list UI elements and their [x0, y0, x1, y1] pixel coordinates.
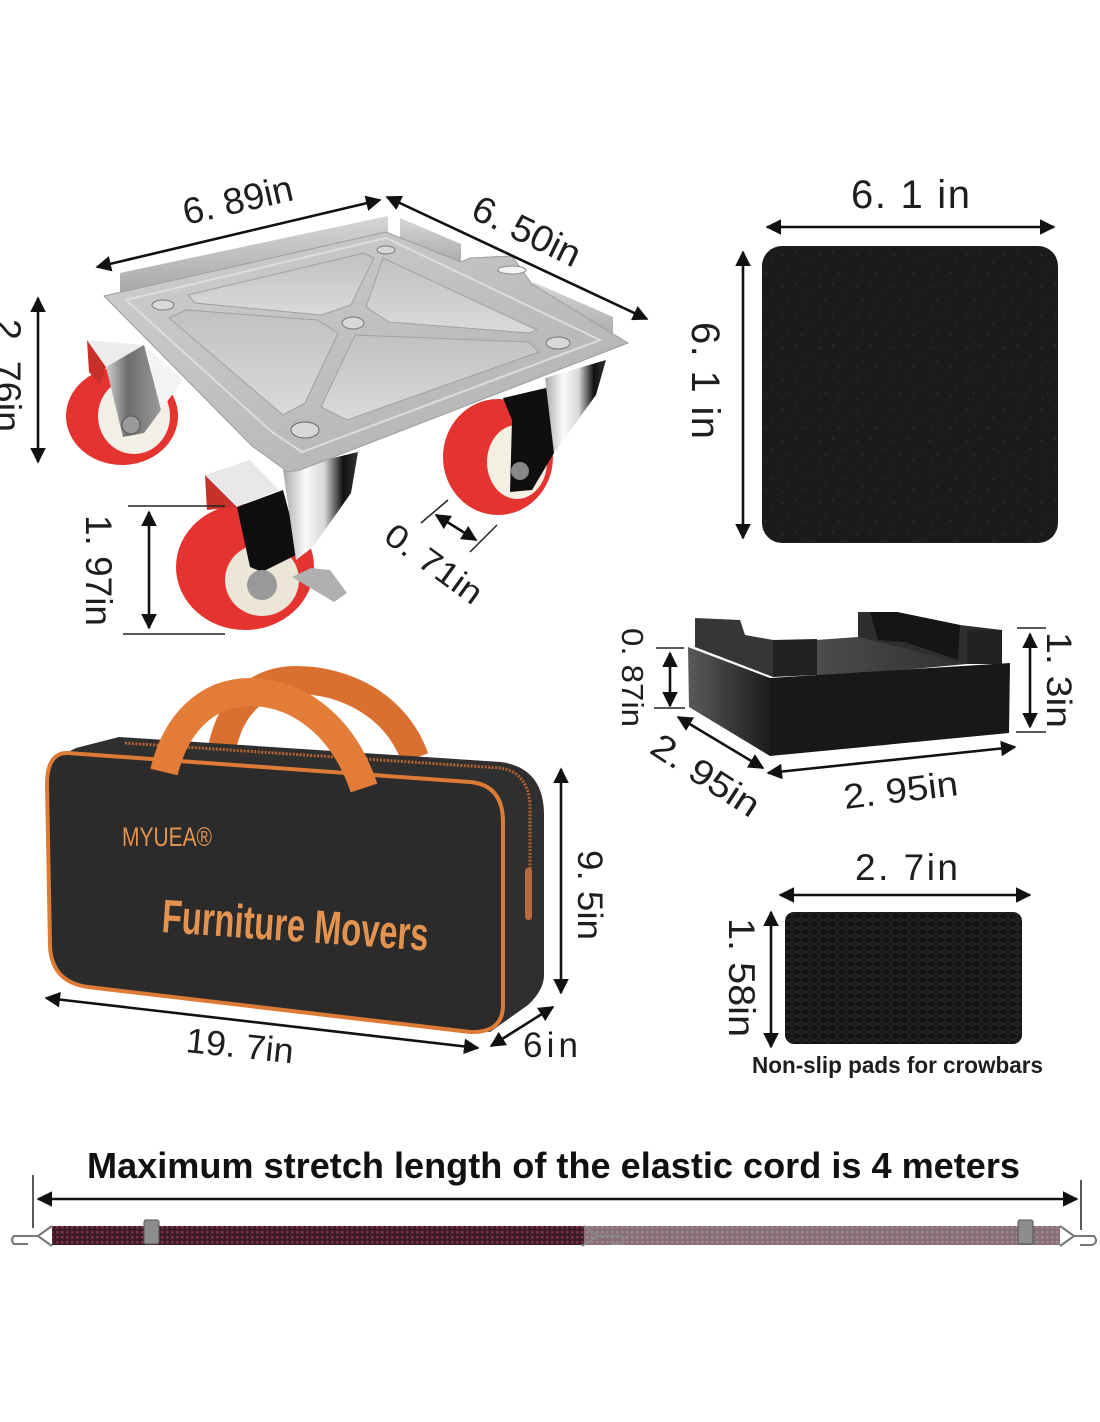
bag handle: front — [164, 692, 364, 788]
cord stretched — [584, 1226, 1060, 1245]
dimension: 9.5in: 9. 5in — [570, 850, 609, 940]
dimension: 1.58in — [721, 912, 771, 1047]
dimension: 19.7in — [46, 998, 478, 1071]
cord sliders — [144, 1220, 1033, 1244]
caster dolly with dimensions — [0, 168, 647, 634]
felt pad — [762, 246, 1058, 543]
dimension: 0.71in — [378, 500, 497, 611]
dimension: 6in — [491, 1007, 578, 1065]
dimension: 6.50in — [387, 187, 647, 319]
zipper pull — [525, 868, 532, 920]
dimension: 6.50in: 6. 50in — [465, 187, 588, 275]
dimension: 1.97in: 1. 97in — [78, 515, 119, 626]
dimension: 6.89in: 6. 89in — [179, 168, 297, 233]
right hook — [1060, 1226, 1096, 1246]
riser block — [688, 612, 1010, 756]
panel: felt pad with dimensions — [683, 173, 1058, 543]
dimension: 0.87in — [615, 628, 685, 727]
zipper — [125, 743, 530, 880]
dimension: 2.7in: 2. 7in — [855, 847, 958, 888]
panel: riser block with dimensions — [615, 612, 1078, 825]
dimension: 6in: 6in — [523, 1026, 578, 1065]
non-slip pad — [785, 912, 1022, 1044]
dimension: depth 2.95in: 2. 95in — [644, 726, 767, 825]
dimension: 6.89in — [97, 168, 380, 267]
caster: rear left wheel — [66, 340, 183, 465]
dimension: top 6.1in: 6. 1 in — [851, 173, 970, 217]
panel: elastic cord — [12, 1145, 1096, 1246]
dimension: 0.71in: 0. 71in — [378, 516, 490, 611]
panel: non-slip pad with dimensions — [721, 847, 1043, 1078]
brand logo: MYUEA® — [122, 822, 212, 852]
bag front panel — [47, 753, 503, 1032]
dimension: left 6.1in: 6. 1 in — [683, 322, 727, 439]
middle hook — [582, 1226, 624, 1246]
dimension: 1.58in: 1. 58in — [721, 918, 762, 1037]
caster: rear right wheel — [443, 360, 606, 515]
dimension: 1.3in: 1. 3in — [1039, 632, 1078, 728]
bag handle: back — [222, 680, 415, 758]
dimension: 0.87in: 0. 87in — [615, 628, 650, 727]
panel: storage bag with dimensions — [46, 680, 609, 1071]
caster: front wheel with brake — [176, 452, 358, 630]
pad caption: Non-slip pads for crowbars — [752, 1052, 1043, 1078]
left hook — [12, 1226, 52, 1246]
bag title: Furniture Movers — [160, 889, 430, 961]
dimension: width 2.95in — [768, 747, 1015, 817]
dimension: width 2.95in: 2. 95in — [841, 764, 960, 817]
dimension: 4 meters — [33, 1175, 1081, 1230]
dimension: 19.7in: 19. 7in — [184, 1021, 296, 1071]
cord unstretched — [52, 1226, 584, 1245]
bag body side — [66, 737, 544, 1032]
cord heading: Maximum stretch length of the elastic cord is 4 meters — [87, 1145, 1020, 1186]
top plate — [104, 216, 628, 472]
dimension: 1.3in — [1016, 628, 1078, 732]
brake lever — [292, 568, 347, 602]
